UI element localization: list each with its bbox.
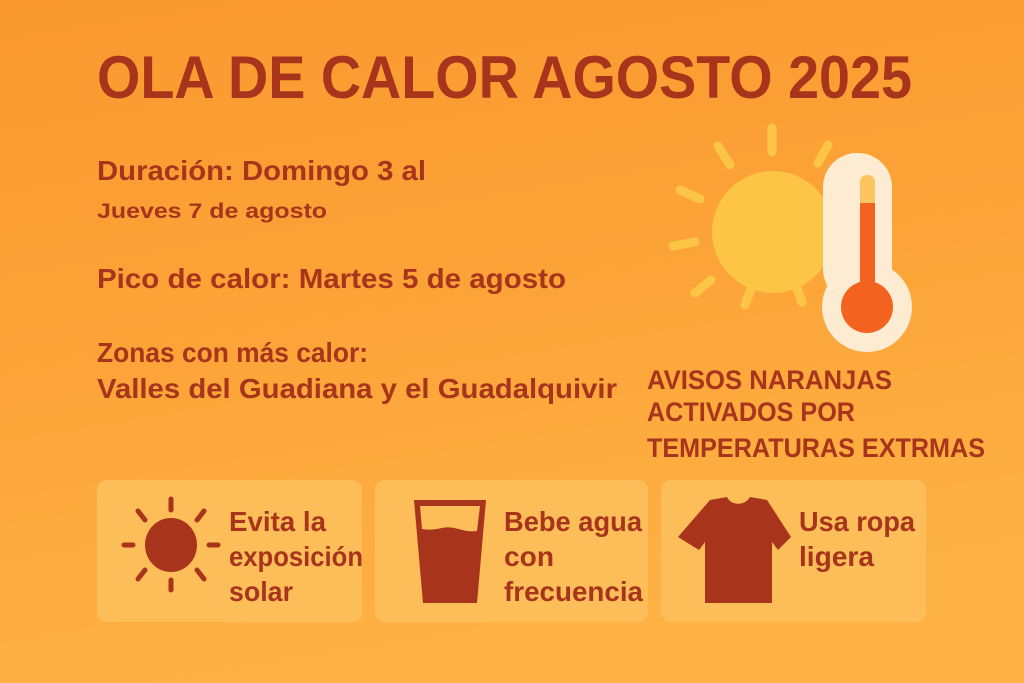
icon: t-shirt <box>678 497 791 603</box>
panel: bebe agua: Bebe agua <box>504 506 642 537</box>
panel: evita exposición solar: solar <box>229 576 293 607</box>
panel: evita exposición solar: exposición <box>229 541 363 572</box>
panel: usa ropa ligera <box>661 480 926 622</box>
text block: duración: Jueves 7 de agosto <box>97 200 327 223</box>
panel: bebe agua <box>375 480 648 622</box>
text block: zonas: Valles del Guadiana y el Guadalquivir <box>97 373 617 404</box>
callout: avisos naranjas: ACTIVADOS POR <box>647 397 855 427</box>
callout: avisos naranjas: AVISOS NARANJAS <box>647 365 892 395</box>
text block: zonas <box>97 337 617 404</box>
title: OLA DE CALOR AGOSTO 2025 <box>97 44 912 111</box>
text block: duración: Duración: Domingo 3 al <box>97 155 426 186</box>
text block: duración <box>97 155 426 223</box>
panel: usa ropa ligera: ligera <box>799 541 874 572</box>
callout: avisos naranjas <box>647 365 985 463</box>
panel: bebe agua: con <box>504 541 554 572</box>
callout: avisos naranjas: TEMPERATURAS EXTRMAS <box>647 433 985 463</box>
text block: zonas: Zonas con más calor: <box>97 337 368 368</box>
text block: pico de calor: Pico de calor: Martes 5 de agosto <box>97 263 566 294</box>
panel: evita exposición solar: Evita la <box>229 506 326 537</box>
icon: glass of water <box>414 500 486 603</box>
icon: sun <box>673 128 834 305</box>
icon: small sun <box>124 499 218 590</box>
icon: thermometer <box>822 153 912 352</box>
panel: usa ropa ligera: Usa ropa <box>799 506 915 537</box>
panel: bebe agua: frecuencia <box>504 576 643 607</box>
panel: evita exposición solar <box>97 480 363 622</box>
